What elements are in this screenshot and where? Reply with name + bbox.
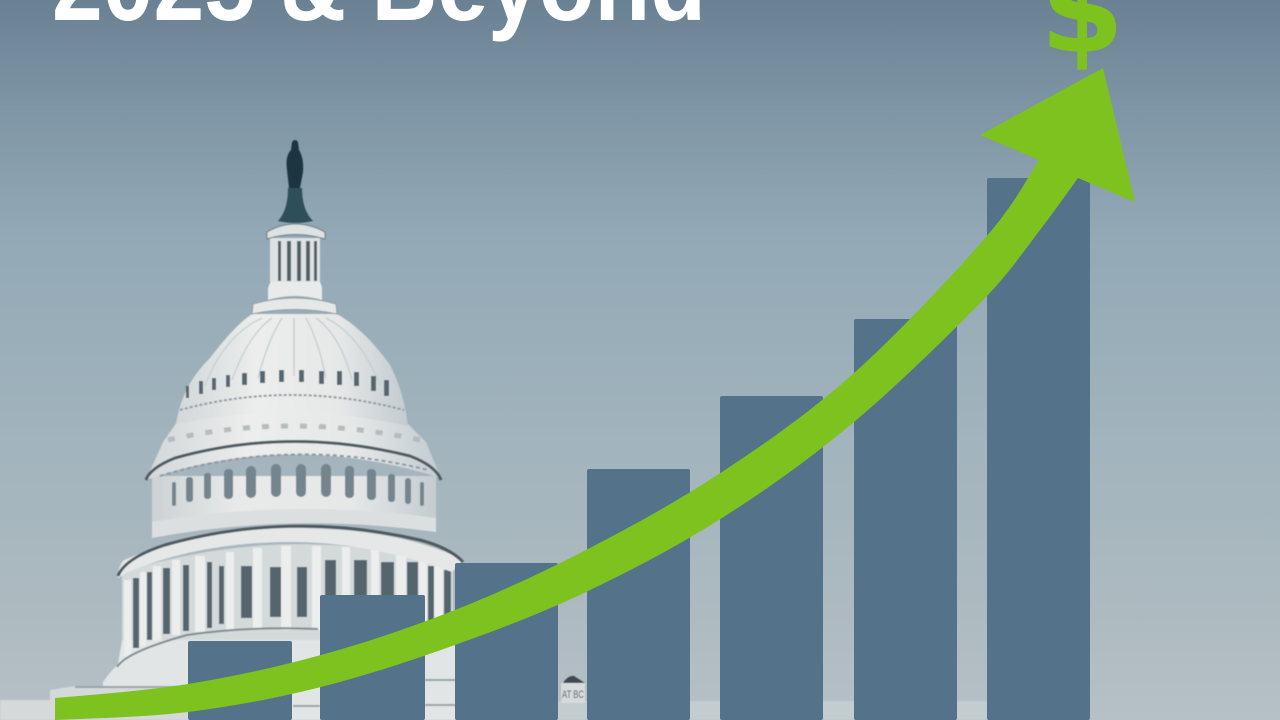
drum windows <box>172 464 424 506</box>
bar 1 <box>188 641 292 720</box>
bar chart <box>188 178 1090 720</box>
bar 7 <box>987 178 1090 720</box>
illustration: capitol building <box>0 140 990 720</box>
sign <box>561 676 585 703</box>
upper drum cornice <box>146 409 441 480</box>
dome ribs <box>205 318 380 385</box>
lantern top <box>278 188 313 223</box>
tholos cap <box>267 224 325 239</box>
bar 4 <box>587 469 690 720</box>
bar 5 <box>720 396 823 720</box>
sign: AT BC <box>562 689 584 701</box>
wall bands <box>75 680 456 706</box>
lower entablature <box>118 528 463 578</box>
bar 6 <box>854 319 957 720</box>
statue <box>286 140 303 188</box>
dark recesses <box>133 560 451 648</box>
growth arrow <box>55 68 1135 720</box>
lantern ring <box>252 298 337 314</box>
dome band <box>180 395 404 410</box>
base arc line <box>117 628 318 667</box>
dome windows <box>186 370 389 398</box>
left wing <box>0 686 190 720</box>
tholos columns <box>270 238 320 282</box>
building lower wall <box>103 640 456 720</box>
bar 2 <box>320 595 425 720</box>
ground strip <box>0 701 990 720</box>
bar 3 <box>455 563 558 720</box>
dome <box>176 314 408 426</box>
colonnade wall <box>122 544 453 640</box>
colonnade <box>122 544 453 656</box>
drum <box>152 476 436 534</box>
tholos base <box>268 280 322 300</box>
columns <box>124 546 443 656</box>
